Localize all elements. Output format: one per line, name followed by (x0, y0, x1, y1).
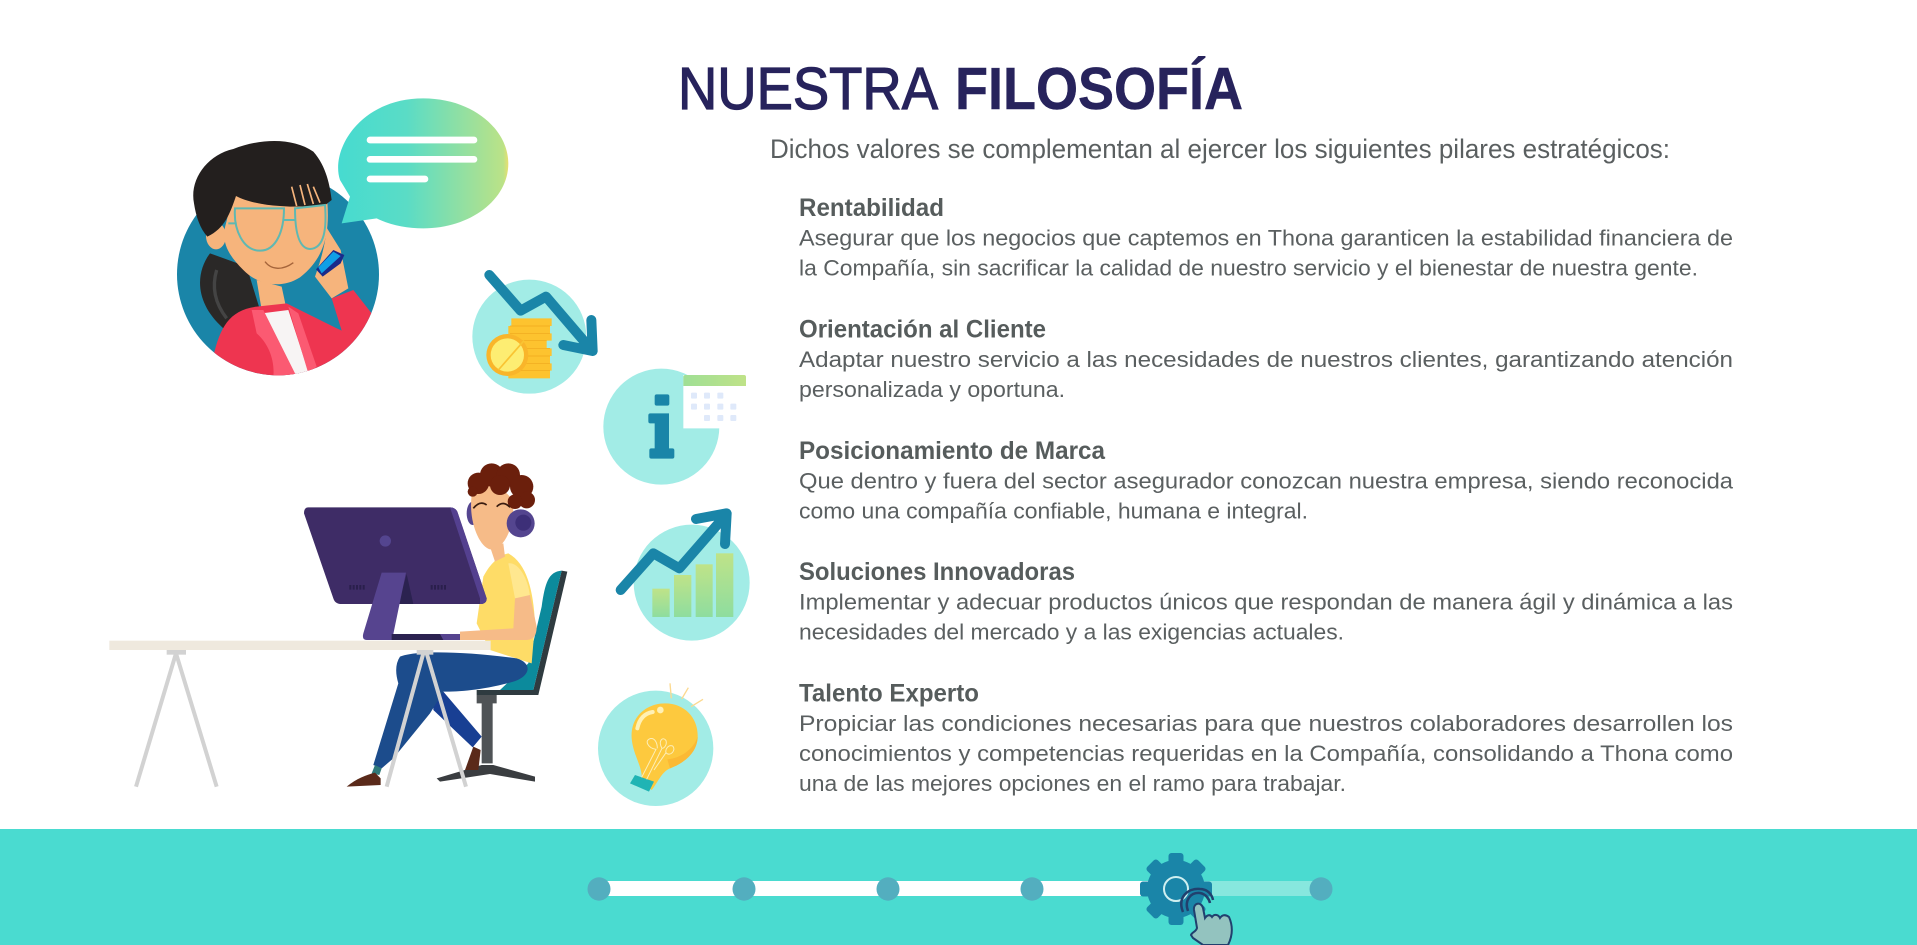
title: FILOSOFÍA (955, 56, 1243, 122)
pillar: Rentabilidad (799, 194, 1733, 280)
pillar: Rentabilidad: la Compañía, sin sacrificar la calidad de nuestro servicio y el bienestar de nuestra gente. (799, 256, 1698, 280)
icon: pointing hand (1181, 889, 1232, 945)
icon: bar chart with rising arrow (621, 513, 750, 641)
pillar: Posicionamiento de Marca: Que dentro y fuera del sector asegurador conozcan nuestra empresa, siendo reconocida (799, 468, 1734, 494)
pillar: Rentabilidad: Rentabilidad (799, 194, 944, 222)
icon: gear (1140, 853, 1212, 925)
icon: light bulb (598, 683, 713, 806)
illustration: woman on phone with speech bubble (177, 98, 508, 380)
pillar: Soluciones Innovadoras: Soluciones Innovadoras (799, 558, 1075, 586)
pillar: Orientación al Cliente: personalizada y oportuna. (799, 377, 1065, 402)
pillar: Talento Experto (799, 680, 1733, 796)
pillar: Posicionamiento de Marca: como una compañía confiable, humana e integral. (799, 498, 1308, 524)
icon: info and calendar (603, 369, 746, 485)
pillar: Rentabilidad: Asegurar que los negocios que captemos en Thona garanticen la estabilidad financiera de (799, 226, 1733, 250)
pillar: Posicionamiento de Marca: Posicionamiento de Marca (799, 437, 1106, 465)
pillar: Orientación al Cliente (799, 316, 1733, 402)
icon: coins with falling arrow (472, 275, 593, 394)
footer band (0, 829, 1917, 945)
progress track (588, 877, 1332, 901)
pillar: Soluciones Innovadoras: Implementar y adecuar productos únicos que respondan de manera ágil y dinámica a las (799, 590, 1733, 614)
pillar: Talento Experto: conocimientos y competencias requeridas en la Compañía, consolidando a Thona como (799, 741, 1733, 766)
illustration: man working at desk (109, 463, 567, 787)
pillar: Orientación al Cliente: Adaptar nuestro servicio a las necesidades de nuestros clientes, garantizando atención (799, 347, 1733, 372)
title (678, 56, 1243, 122)
pillar: Soluciones Innovadoras: necesidades del mercado y a las exigencias actuales. (799, 620, 1344, 644)
pillar: Soluciones Innovadoras (799, 558, 1733, 644)
pillar: Talento Experto: una de las mejores opciones en el ramo para trabajar. (799, 771, 1346, 796)
pillar: Posicionamiento de Marca (799, 437, 1734, 524)
pillar: Orientación al Cliente: Orientación al Cliente (799, 316, 1046, 344)
pillar: Talento Experto: Talento Experto (799, 680, 979, 708)
pillar: Talento Experto: Propiciar las condiciones necesarias para que nuestros colaboradores desarrollen los (799, 711, 1733, 736)
intro text: Dichos valores se complementan al ejercer los siguientes pilares estratégicos: (770, 134, 1670, 164)
title: NUESTRA (678, 56, 939, 122)
